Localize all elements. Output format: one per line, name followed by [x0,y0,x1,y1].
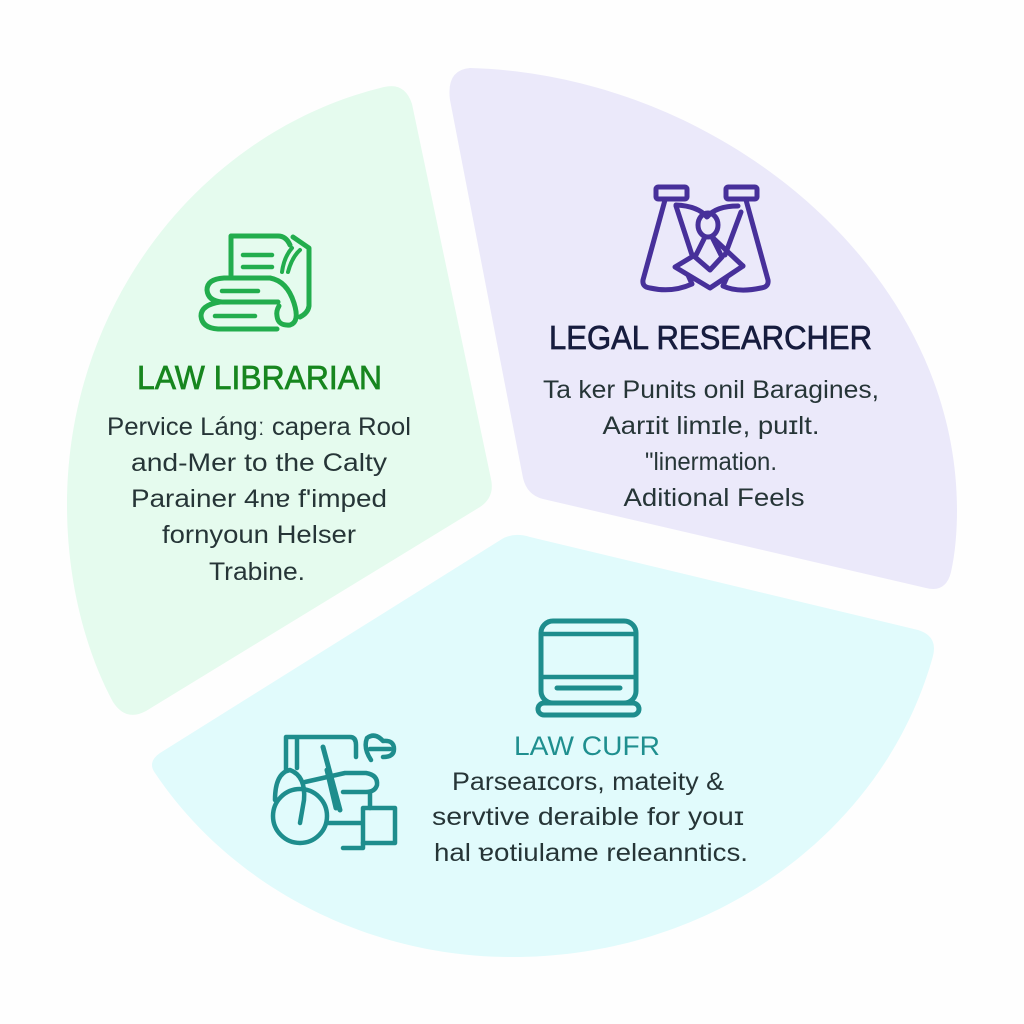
body text: Ta ker Punits onil Baragines, [543,376,879,404]
segment: purple [449,68,957,589]
body text: hal ɐotiulame releanntics. [434,839,748,867]
body text: Parseaɪcors, mateity & [452,768,724,796]
panel: legal researcher [449,68,957,589]
icon: books and document [201,236,309,329]
body text [432,768,748,867]
heading: LEGAL RESEARCHER [549,319,872,356]
body text [543,376,879,512]
segment: green [67,86,492,715]
heading: LAW CUFR [514,731,660,761]
segment: teal [152,535,934,957]
body text: and-Mer to the Calty [131,449,388,477]
icon: binoculars and figure [643,187,768,290]
panel: law librarian [67,86,492,715]
heading: LAW LIBRARIAN [137,359,382,396]
body text: servtive deraible for youɪ [432,803,744,831]
body text: fornyoun Helser [162,521,356,549]
body text: Trabine. [209,558,305,586]
icon: desk and tools [273,736,395,848]
body text: Aditional Feels [624,484,804,512]
body text: Pervice Lángː capera Rool [107,413,411,441]
body text [107,413,411,586]
body text: Parainer 4nɐ f'imped [131,485,387,513]
panel: law cufr [152,535,934,957]
icon: laptop [538,621,639,715]
body text: Aarɪit limɪle, puɪlt. [602,412,820,440]
body text: "linermation. [645,448,777,476]
